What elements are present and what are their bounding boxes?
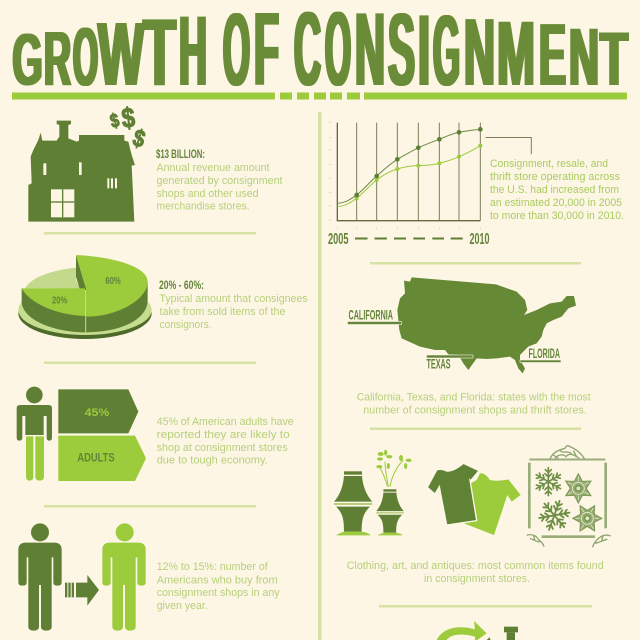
column divider: [318, 112, 322, 640]
icon: house with dollar signs: $: [108, 109, 122, 132]
arrow box: adults: [58, 436, 146, 481]
icon: framed snowflakes: [527, 446, 611, 547]
pie chart: 60%: [105, 276, 121, 287]
panel: growth chart: [328, 123, 624, 248]
buyers text: [157, 561, 280, 612]
title: N: [569, 12, 599, 103]
panel: revenue: [28, 101, 282, 222]
chart text: an estimated 20,000 in 2005: [490, 197, 622, 209]
map text: California, Texas, and Florida: states with the most: [357, 392, 591, 404]
timeline axis: 2010: [470, 231, 490, 248]
chart text: [490, 158, 624, 222]
chart text: thrift store operating across: [490, 171, 620, 183]
title: T: [143, 0, 176, 106]
buyers text: consignment shops in any: [157, 587, 280, 599]
pie chart: 20%: [52, 295, 68, 306]
map text: [357, 392, 591, 416]
pie chart: [18, 255, 152, 339]
panel: adults: [17, 387, 294, 481]
icon: arrow: [65, 575, 99, 606]
panel: buyers: [18, 523, 280, 631]
title: W: [98, 5, 144, 105]
pie heading: 20% - 60%:: [159, 278, 204, 292]
icon: recycling arrow and chimney: [437, 621, 518, 640]
chart text: Consignment, resale, and: [490, 158, 608, 170]
pie text: take from sold items of the: [160, 306, 286, 318]
revenue heading: $13 BILLION:: [156, 147, 205, 161]
panel: map: [348, 277, 591, 416]
icon: shirts: [427, 463, 521, 535]
line chart: [329, 123, 483, 230]
revenue text: Annual revenue amount: [156, 162, 270, 174]
buyers text: given year.: [157, 600, 208, 612]
label: Florida: [520, 346, 561, 362]
label: California: CALIFORNIA: [348, 308, 393, 322]
title underline bar: [12, 92, 627, 100]
timeline axis: 2005: [328, 231, 349, 248]
icon: light person: [102, 523, 146, 631]
label: Texas: TEXAS: [426, 356, 450, 372]
revenue text: [156, 162, 282, 212]
pie text: consignors.: [160, 319, 212, 331]
title: M: [497, 3, 535, 105]
icon: house with dollar signs: $: [120, 101, 137, 134]
adults text: reported they are likely to: [157, 429, 290, 441]
label: California: [348, 308, 402, 324]
buyers text: Americans who buy from: [157, 574, 278, 586]
revenue text: shops and other used: [156, 188, 258, 200]
title: N: [464, 0, 495, 106]
adults text: shop at consignment stores: [157, 442, 288, 454]
label: Florida: FLORIDA: [528, 346, 560, 361]
map text: number of consignment shops and thrift stores.: [363, 404, 587, 416]
title: [12, 0, 628, 108]
items text: Clothing, art, and antiques: most common items found: [347, 560, 604, 572]
icon: house with dollar signs: [28, 101, 149, 222]
title: G: [12, 20, 42, 101]
adults text: 45% of American adults have: [157, 416, 294, 428]
items text: [347, 560, 604, 585]
panel: pie share: [18, 255, 308, 339]
connector line: [486, 138, 531, 154]
panel: common items: [334, 446, 611, 585]
buyers text: 12% to 15%: number of: [157, 561, 269, 573]
adults text: due to tough economy.: [157, 454, 268, 466]
revenue text: generated by consignment: [156, 175, 282, 187]
arrow box: 45%: [58, 389, 138, 433]
icon: large vase: [334, 471, 372, 535]
icon: house with dollar signs: $: [130, 124, 149, 153]
chart text: the U.S. had increased from: [490, 184, 619, 196]
icon: half-filled person: [17, 387, 52, 481]
items text: in consignment stores.: [424, 573, 530, 585]
US map: [397, 277, 576, 373]
icon: dark person: [18, 523, 62, 631]
adults text: [157, 416, 294, 466]
arrow box: 45%: 45%: [85, 407, 110, 419]
revenue text: merchandise stores.: [156, 200, 250, 212]
pie text: [160, 293, 308, 331]
chart text: to more than 30,000 in 2010.: [490, 210, 624, 222]
arrow box: adults: ADULTS: [77, 451, 115, 465]
title: O: [73, 10, 98, 103]
title: E: [539, 5, 566, 104]
pie text: Typical amount that consignees: [160, 293, 308, 305]
icon: small vase with flowers: [376, 450, 412, 535]
timeline axis: [328, 231, 490, 248]
title: R: [44, 16, 71, 102]
